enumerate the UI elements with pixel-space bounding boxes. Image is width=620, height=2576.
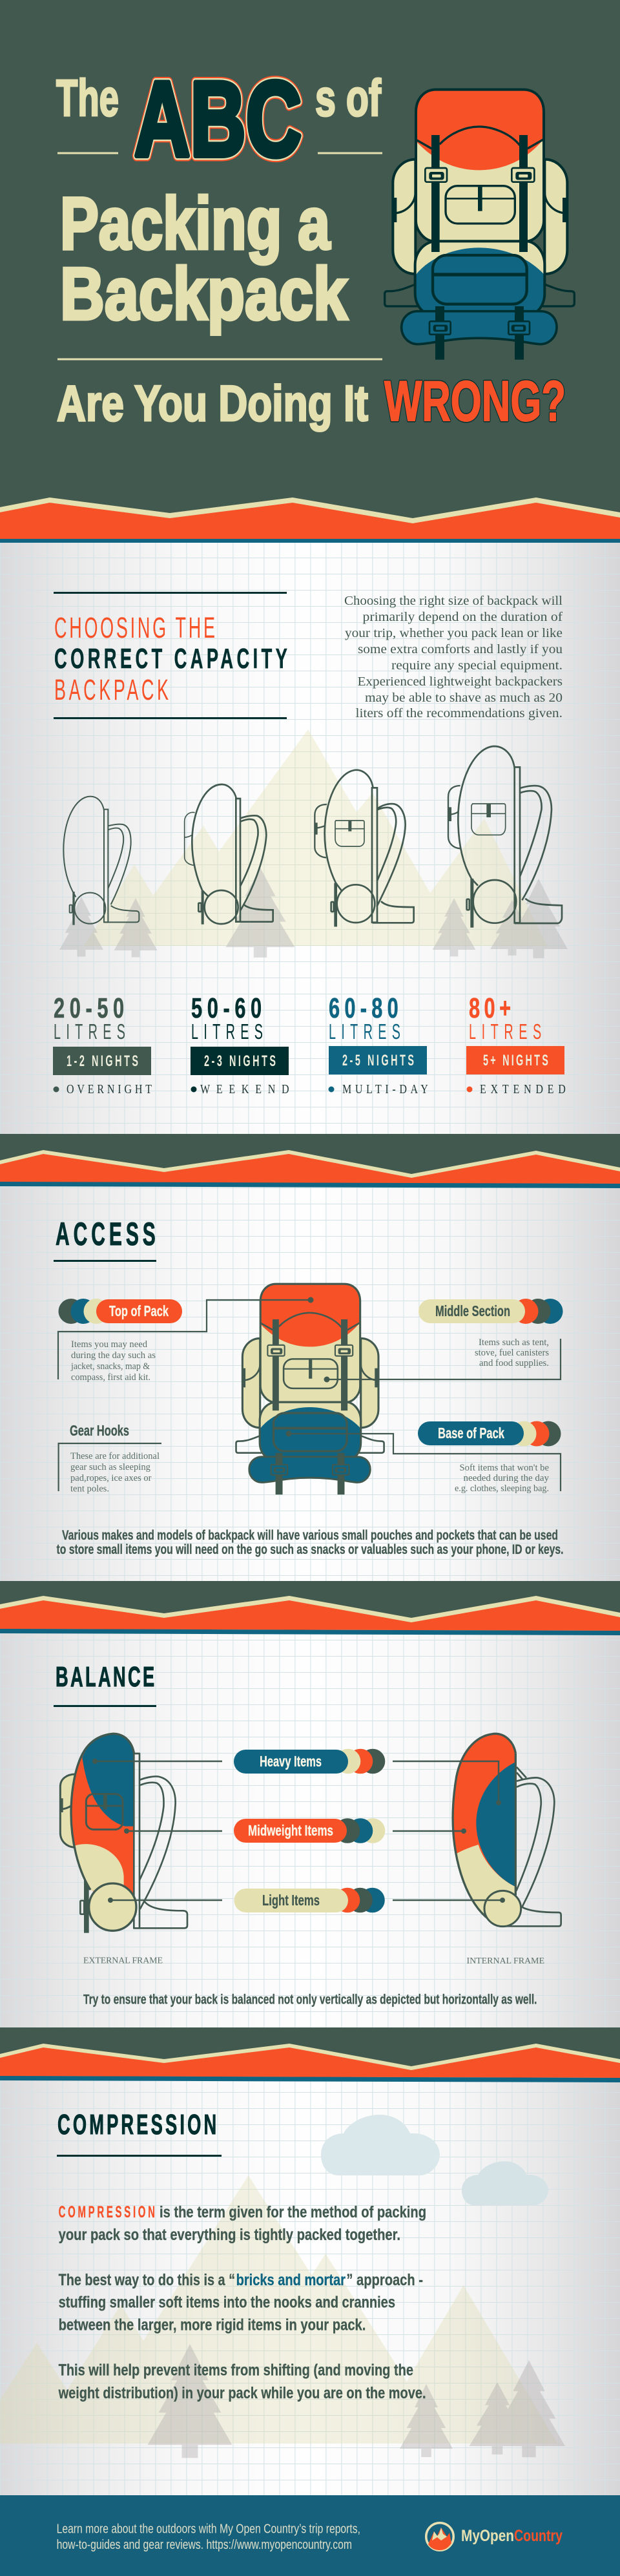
intro text: may be able to shave as much as 20 (365, 691, 563, 705)
stat: 50-60 litres: 50-60 (191, 993, 262, 1024)
icon: small cloud (462, 2161, 548, 2205)
title: ABC (134, 59, 302, 178)
stat: 80+ litres: LITRES (469, 1020, 541, 1043)
text: base of pack: needed during the day (464, 1473, 549, 1483)
heading: ACCESS (56, 1216, 156, 1252)
text: top of pack: Items you may need (71, 1339, 147, 1350)
access note (57, 1528, 563, 1557)
panel: header (0, 0, 620, 543)
logo wordmark: MyOpen (461, 2527, 514, 2545)
mountain ridge divider (0, 497, 620, 543)
title: Are You Doing It (57, 375, 368, 432)
title: Packing a (60, 183, 331, 265)
panel: access (0, 1134, 620, 1557)
text: base of pack: e.g. clothes, sleeping bag. (455, 1483, 549, 1494)
intro text: Choosing the right size of backpack will (344, 594, 563, 608)
label: middle section: Middle Section (435, 1303, 510, 1319)
heading: CHOOSING THE (54, 611, 215, 644)
background mountains (0, 2175, 557, 2444)
heading (54, 592, 287, 719)
stat: 20-50 litres: 1-2 NIGHTS (67, 1052, 138, 1070)
stat: 80+ litres: 80+ (469, 993, 511, 1024)
intro text: some extra comforts and lastly if you (358, 642, 563, 656)
footer text: how-to-guides and gear reviews. https://www.myopencountry.com (57, 2538, 352, 2552)
intro text (344, 594, 563, 720)
text: middle section (475, 1337, 549, 1368)
caption: internal frame: INTERNAL FRAME (466, 1956, 544, 1966)
heading: CORRECT CAPACITY (54, 642, 287, 675)
intro text: primarily depend on the duration of (363, 610, 563, 624)
text: top of pack: compass, first aid kit. (71, 1372, 150, 1383)
footer text (57, 2522, 360, 2552)
panel: compression (0, 2027, 620, 2458)
panel: balance (0, 1581, 620, 2007)
leader lines (58, 1297, 561, 1491)
heading: BALANCE (56, 1660, 154, 1693)
label: gear hooks: Gear Hooks (70, 1422, 129, 1439)
compression text: stuffing smaller soft items into the nooks and crannies (59, 2294, 395, 2312)
label: light items: Light Items (262, 1892, 320, 1909)
title: The (56, 69, 119, 127)
stat: 60-80 litres: LITRES (329, 1020, 400, 1043)
heading (57, 2108, 222, 2157)
stat: 50-60 litres: 2-3 NIGHTS (204, 1052, 276, 1070)
heading (54, 1660, 156, 1707)
label: top of pack: Top of Pack (109, 1303, 169, 1319)
intro text: Experienced lightweight backpackers (358, 675, 563, 689)
compression text: weight distribution) in your pack while you are on the move. (58, 2384, 426, 2402)
icon: internal frame pack (453, 1733, 561, 1927)
stat: 60-80 litres: MULTI-DAY (342, 1082, 428, 1096)
stat: 20-50 litres: OVERNIGHT (67, 1082, 152, 1096)
icon: large cloud (321, 2115, 440, 2175)
compression text: is the term given for the method of packing (160, 2203, 426, 2221)
compression text: between the larger, more rigid items in your pack. (59, 2316, 366, 2334)
text: middle section: and food supplies. (479, 1358, 549, 1368)
heading: BACKPACK (54, 673, 169, 706)
logo wordmark: Country (514, 2527, 563, 2545)
stat: 80+ litres: EXTENDED (480, 1082, 566, 1096)
stat: 20-50 litres (53, 993, 152, 1096)
compression text: bricks and mortar (236, 2271, 346, 2289)
heading: COMPRESSION (57, 2108, 216, 2141)
panel: footer (0, 2495, 620, 2576)
title: ABC (134, 59, 302, 178)
background trees (147, 2344, 565, 2458)
label: midweight items: Midweight Items (248, 1822, 333, 1839)
compression text: COMPRESSION (59, 2203, 155, 2221)
icon: 50-60 litre pack (185, 784, 273, 925)
caption: external frame: EXTERNAL FRAME (83, 1956, 163, 1965)
stat: 20-50 litres: 20-50 (54, 993, 124, 1024)
icon: external frame pack (60, 1733, 187, 1933)
title: Backpack (60, 253, 347, 335)
text: gear hooks: tent poles. (70, 1483, 109, 1494)
title: s of (315, 69, 381, 127)
section divider (0, 2027, 620, 2082)
text: top of pack: during the day such as (71, 1350, 156, 1361)
text: base of pack: Soft items that won't be (460, 1463, 549, 1473)
text: middle section: Items such as tent, (479, 1337, 549, 1348)
icon: backpack front view (385, 90, 574, 360)
stat: 80+ litres: 5+ NIGHTS (483, 1052, 548, 1069)
intro text: require any special equipment. (391, 658, 563, 673)
compression text: ” approach - (346, 2271, 423, 2289)
section divider (0, 1134, 620, 1188)
text: top of pack: jacket, snacks, map & (70, 1361, 150, 1372)
icon: 80+ litre pack (448, 746, 562, 928)
compression text: The best way to do this is a “ (59, 2271, 235, 2289)
label: heavy items: Heavy Items (260, 1753, 322, 1770)
stat: 20-50 litres: LITRES (54, 1020, 125, 1043)
label: heavy items (234, 1749, 385, 1774)
icon: 20-50 litre pack (63, 797, 139, 925)
icon: 60-80 litre pack (315, 770, 414, 927)
icon: backpack with callouts (236, 1284, 384, 1494)
logo wordmark (461, 2527, 563, 2545)
label: base of pack: Base of Pack (438, 1425, 504, 1441)
text: gear hooks: gear such as sleeping (70, 1462, 150, 1472)
compression text: your pack so that everything is tightly packed together. (59, 2226, 400, 2244)
label: midweight items (234, 1818, 385, 1843)
background trees (59, 868, 568, 958)
text: gear hooks: These are for additional (70, 1451, 160, 1461)
stat: 60-80 litres: 2-5 NIGHTS (342, 1052, 414, 1069)
label: base of pack (418, 1421, 561, 1446)
footer text: Learn more about the outdoors with My Open Country’s trip reports, (57, 2522, 360, 2537)
section divider (0, 1581, 620, 1635)
stat: 80+ litres (466, 993, 566, 1096)
text: middle section: stove, fuel canisters (475, 1348, 549, 1358)
label: middle section (418, 1299, 563, 1324)
text: top of pack (70, 1339, 156, 1383)
compression text: This will help prevent items from shifting (and moving the (59, 2361, 413, 2379)
stat: 50-60 litres: LITRES (191, 1020, 263, 1043)
stat: 60-80 litres (328, 993, 428, 1096)
panel: choosing the correct capacity (53, 592, 568, 1096)
text: base of pack (455, 1463, 549, 1494)
title: ABC (134, 59, 302, 178)
text: gear hooks: pad,ropes, ice axes or (70, 1473, 152, 1483)
label: top of pack (58, 1299, 182, 1324)
intro text: your trip, whether you pack lean or like (345, 626, 563, 640)
stat: 50-60 litres: WEEKEND (200, 1082, 289, 1096)
compression text (58, 2203, 426, 2402)
title (56, 59, 566, 433)
stat: 60-80 litres: 60-80 (329, 993, 398, 1024)
background mountains (84, 729, 547, 946)
intro text: liters off the recommendations given. (355, 706, 563, 720)
leader lines (92, 1759, 505, 1903)
icon: My Open Country logo (426, 2522, 454, 2551)
text: gear hooks (70, 1451, 160, 1494)
label: light items (234, 1888, 385, 1912)
stat: 50-60 litres (191, 993, 289, 1096)
